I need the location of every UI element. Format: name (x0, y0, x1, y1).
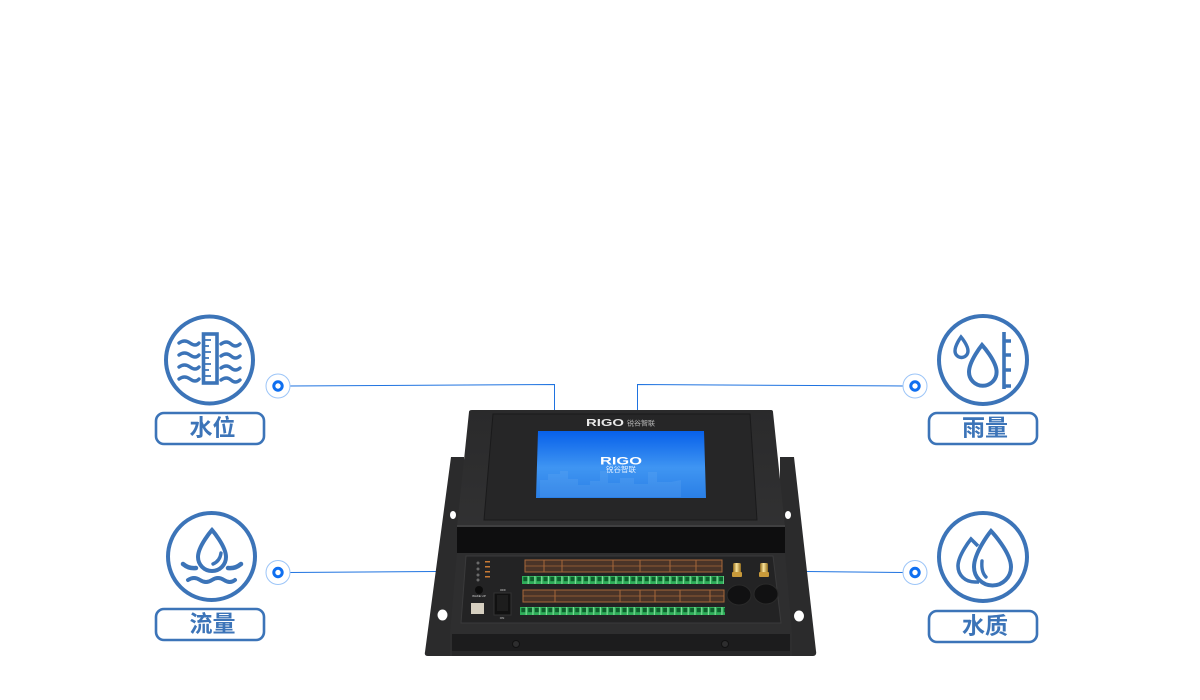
logo on bezel: 锐谷智联 (627, 418, 655, 428)
node: water level (266, 374, 290, 398)
touch screen (536, 431, 706, 498)
logo on bezel (586, 418, 655, 429)
node: rainfall (903, 374, 927, 398)
icon: flow (168, 513, 255, 600)
orange label strip: row 2 (523, 590, 724, 602)
label: water level (156, 413, 264, 444)
connector line: rainfall (638, 384, 905, 410)
power switch: OFF (500, 588, 506, 592)
label: rainfall (929, 413, 1037, 444)
icon: rainfall (939, 316, 1027, 404)
lower body (450, 540, 792, 656)
logo on bezel: RIGO (586, 418, 624, 429)
node: water quality (903, 560, 927, 584)
ethernet port (471, 603, 484, 614)
label: rainfall: 雨量 (962, 414, 1008, 440)
bottom front strip (452, 634, 790, 656)
status LEDs (476, 561, 490, 582)
connector line: water quality (806, 572, 905, 573)
mounting holes (438, 511, 804, 622)
touch screen: RIGO (600, 456, 643, 468)
power switch: ON (500, 616, 504, 620)
display bezel (484, 414, 757, 520)
power switch (494, 588, 511, 620)
label: water quality: 水质 (962, 612, 1008, 638)
node: flow (266, 560, 290, 584)
upper enclosure top (457, 410, 785, 527)
upper enclosure front (457, 527, 785, 553)
icon: water level (166, 316, 253, 404)
device: data logger (425, 410, 816, 656)
green terminals: row 1 (522, 576, 724, 584)
green terminals: row 2 (520, 607, 725, 615)
touch screen: 锐谷智联 (606, 464, 636, 474)
label: flow: 流量 (190, 610, 236, 636)
orange label strip: row 1 (525, 560, 722, 572)
connector line: water level (288, 384, 554, 410)
wake up button (472, 586, 486, 598)
terminal panel (461, 556, 781, 623)
connector line: flow (288, 572, 436, 573)
round caps (727, 584, 778, 605)
antenna connectors (732, 563, 769, 577)
icon: water quality (939, 513, 1027, 601)
right mounting flange (780, 457, 816, 656)
label: flow (156, 609, 264, 640)
left mounting flange (425, 457, 464, 656)
label: water level: 水位 (190, 414, 236, 440)
label: water quality (929, 611, 1037, 642)
wake up button: WAKE UP (472, 594, 486, 598)
